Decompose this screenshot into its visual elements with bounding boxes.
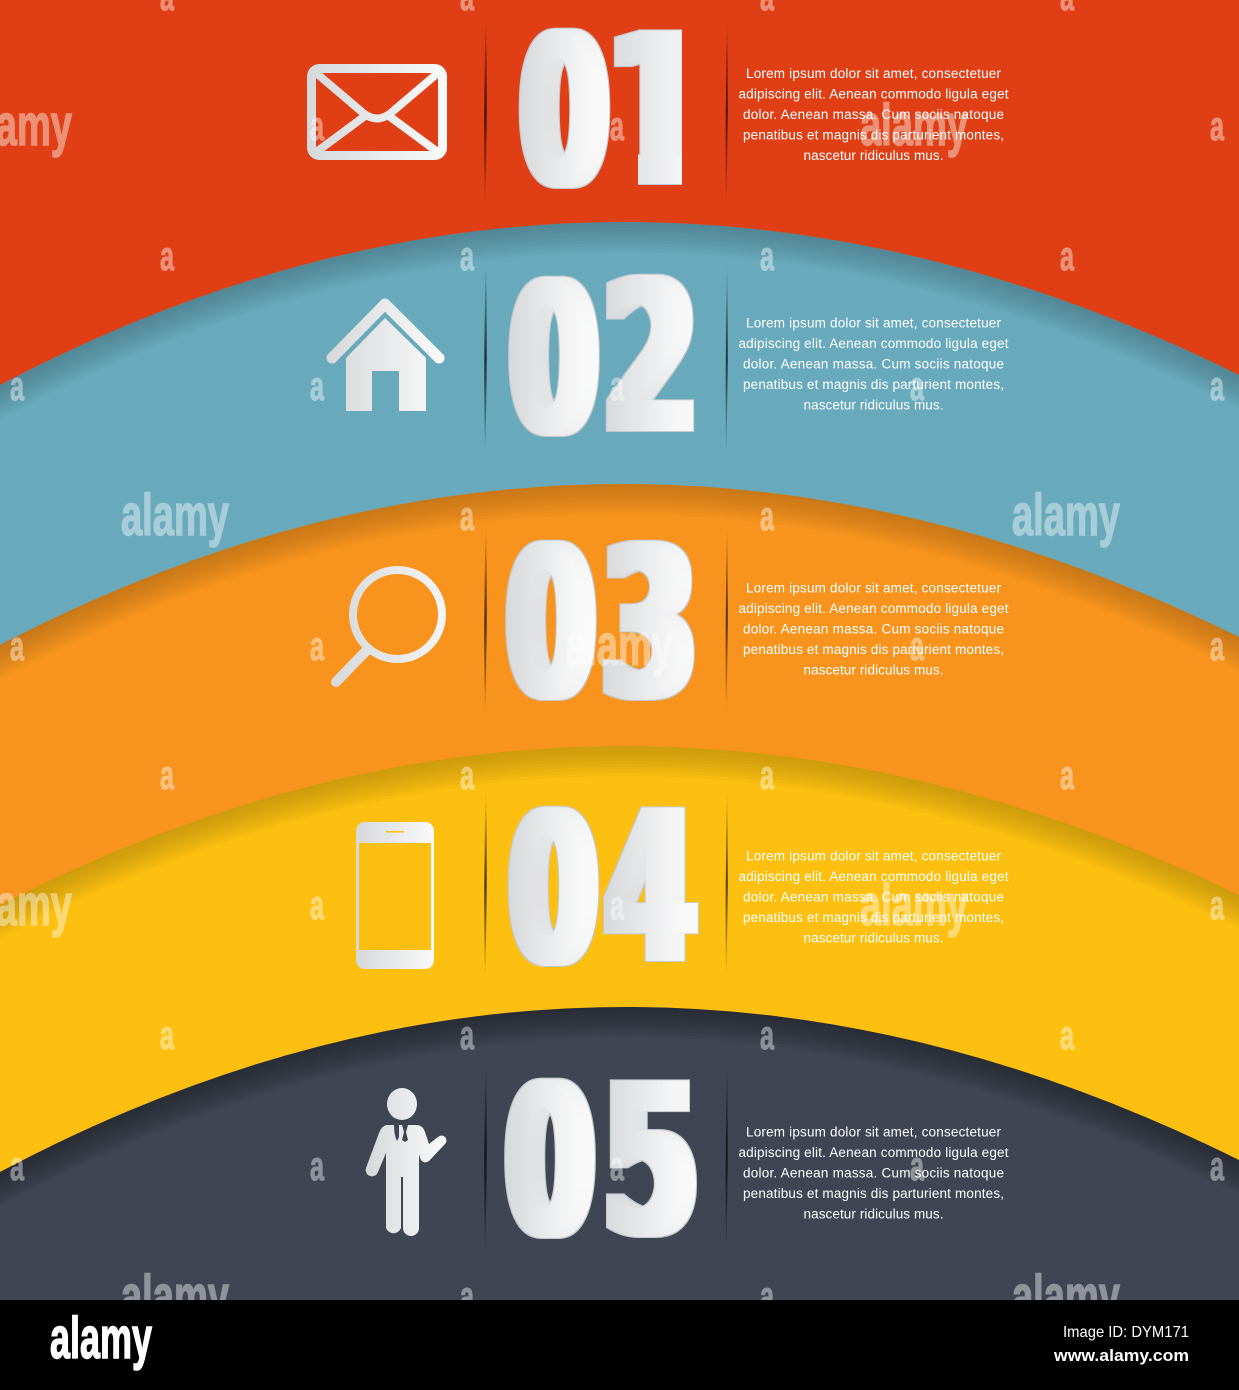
text block 05: Lorem ipsum dolor sit amet, consectetuer (746, 1124, 1002, 1140)
image id: Image ID: DYM171 (1063, 1324, 1189, 1341)
footer logo: alamy (50, 1306, 152, 1371)
watermarks: a (310, 363, 325, 409)
text block 03: Lorem ipsum dolor sit amet, consectetuer (746, 580, 1002, 596)
watermarks: a (10, 363, 25, 409)
number 04 (511, 766, 696, 1012)
watermarks: a (910, 623, 925, 669)
watermarks: alamy (1012, 483, 1120, 548)
text block 04: adipiscing elit. Aenean commodo ligula eget (738, 869, 1009, 884)
number 05: 5 (605, 1041, 697, 1283)
number 02: 2 (604, 238, 697, 480)
icon: smartphone (356, 822, 434, 969)
watermarks: a (610, 882, 625, 928)
icon: envelope (312, 68, 442, 156)
watermarks: a (1210, 1143, 1225, 1189)
icon: magnifying glass (336, 570, 442, 682)
watermarks: alamy (565, 613, 673, 678)
watermarks: a (460, 493, 475, 539)
text block 03 (738, 580, 1009, 678)
panel: blue band 02 (0, 222, 1239, 645)
panel: orange band 03 (0, 484, 1239, 905)
number 05 (507, 1041, 697, 1284)
text block 04 (738, 848, 1009, 946)
text block 01: nascetur ridiculus mus. (804, 148, 944, 163)
watermarks: a (760, 233, 775, 279)
watermarks: a (610, 1143, 625, 1189)
watermarks: a (1060, 1012, 1075, 1058)
watermarks: alamy (860, 873, 968, 938)
watermarks: a (460, 752, 475, 798)
watermarks: a (310, 623, 325, 669)
watermarks: a (760, 1273, 775, 1319)
text block 03: dolor. Aenean massa. Cum sociis natoque (743, 622, 1004, 636)
watermarks: alamy (860, 93, 968, 158)
number 03 (508, 504, 697, 746)
watermarks: a (760, 1012, 775, 1058)
watermarks: a (460, 233, 475, 279)
watermarks: a (910, 1143, 925, 1189)
watermarks: a (610, 363, 625, 409)
text block 01: penatibus et magnis dis parturient montes, (743, 128, 1004, 142)
watermarks: a (1210, 882, 1225, 928)
text block 01: Lorem ipsum dolor sit amet, consectetuer (746, 66, 1002, 81)
panel: dark band 05 (0, 1007, 1239, 1300)
watermarks: a (10, 623, 25, 669)
watermarks: a (1060, 233, 1075, 279)
text block 01 (738, 66, 1009, 163)
text block 03: nascetur ridiculus mus. (804, 662, 944, 678)
watermarks: a (1210, 363, 1225, 409)
text block 04: penatibus et magnis dis parturient montes, (743, 910, 1004, 925)
icon: businessman (366, 1088, 446, 1236)
watermarks: a (160, 1012, 175, 1058)
watermarks: a (1210, 103, 1225, 149)
watermarks: a (610, 103, 625, 149)
watermarks: a (760, 752, 775, 798)
text block 04: Lorem ipsum dolor sit amet, consectetuer (746, 848, 1002, 864)
number 02 (511, 238, 697, 482)
watermarks: a (160, 752, 175, 798)
watermarks: a (1060, 752, 1075, 798)
number 03: 0 (508, 504, 594, 746)
text block 04: dolor. Aenean massa. Cum sociis natoque (743, 890, 1004, 904)
number 02: 0 (511, 240, 597, 482)
text block 05: nascetur ridiculus mus. (804, 1206, 944, 1222)
text block 02: adipiscing elit. Aenean commodo ligula eget (738, 336, 1009, 351)
watermarks: a (310, 1143, 325, 1189)
watermarks: a (310, 882, 325, 928)
text block 05: dolor. Aenean massa. Cum sociis natoque (743, 1166, 1004, 1180)
watermarks: a (460, 1012, 475, 1058)
text block 03: adipiscing elit. Aenean commodo ligula eget (738, 601, 1009, 616)
text block 02: penatibus et magnis dis parturient montes, (743, 377, 1004, 392)
text block 01: adipiscing elit. Aenean commodo ligula eget (738, 86, 1009, 102)
watermarks: a (760, 493, 775, 539)
paper slits (484, 15, 728, 1255)
text block 02: Lorem ipsum dolor sit amet, consectetuer (746, 316, 1002, 330)
footer bar (0, 1300, 1239, 1390)
watermarks: a (160, 233, 175, 279)
number 04: 0 (511, 770, 596, 1012)
text block 03: penatibus et magnis dis parturient montes, (743, 642, 1004, 657)
number 01 (518, 28, 682, 189)
watermarks: alamy (1012, 1264, 1120, 1329)
watermarks: a (460, 1273, 475, 1319)
watermarks: a (310, 103, 325, 149)
text block 05: adipiscing elit. Aenean commodo ligula eget (738, 1145, 1009, 1160)
text block 05: penatibus et magnis dis parturient montes, (743, 1186, 1004, 1201)
number 03: 3 (602, 504, 697, 746)
watermarks: a (10, 1143, 25, 1189)
text block 02: dolor. Aenean massa. Cum sociis natoque (743, 356, 1004, 372)
text block 02: nascetur ridiculus mus. (804, 398, 944, 412)
number 05: 0 (507, 1042, 593, 1284)
watermarks: a (1210, 623, 1225, 669)
text block 05 (738, 1124, 1009, 1222)
panel: yellow band 04 (0, 746, 1239, 1172)
watermarks: alamy (121, 483, 229, 548)
text block 01: dolor. Aenean massa. Cum sociis natoque (743, 107, 1004, 122)
website: www.alamy.com (1053, 1346, 1189, 1365)
number 04: 4 (606, 766, 696, 1009)
text block 02 (738, 316, 1009, 412)
watermarks: alamy (121, 1264, 229, 1329)
icon: house (332, 304, 439, 411)
watermarks: a (910, 363, 925, 409)
text block 04: nascetur ridiculus mus. (804, 930, 944, 946)
